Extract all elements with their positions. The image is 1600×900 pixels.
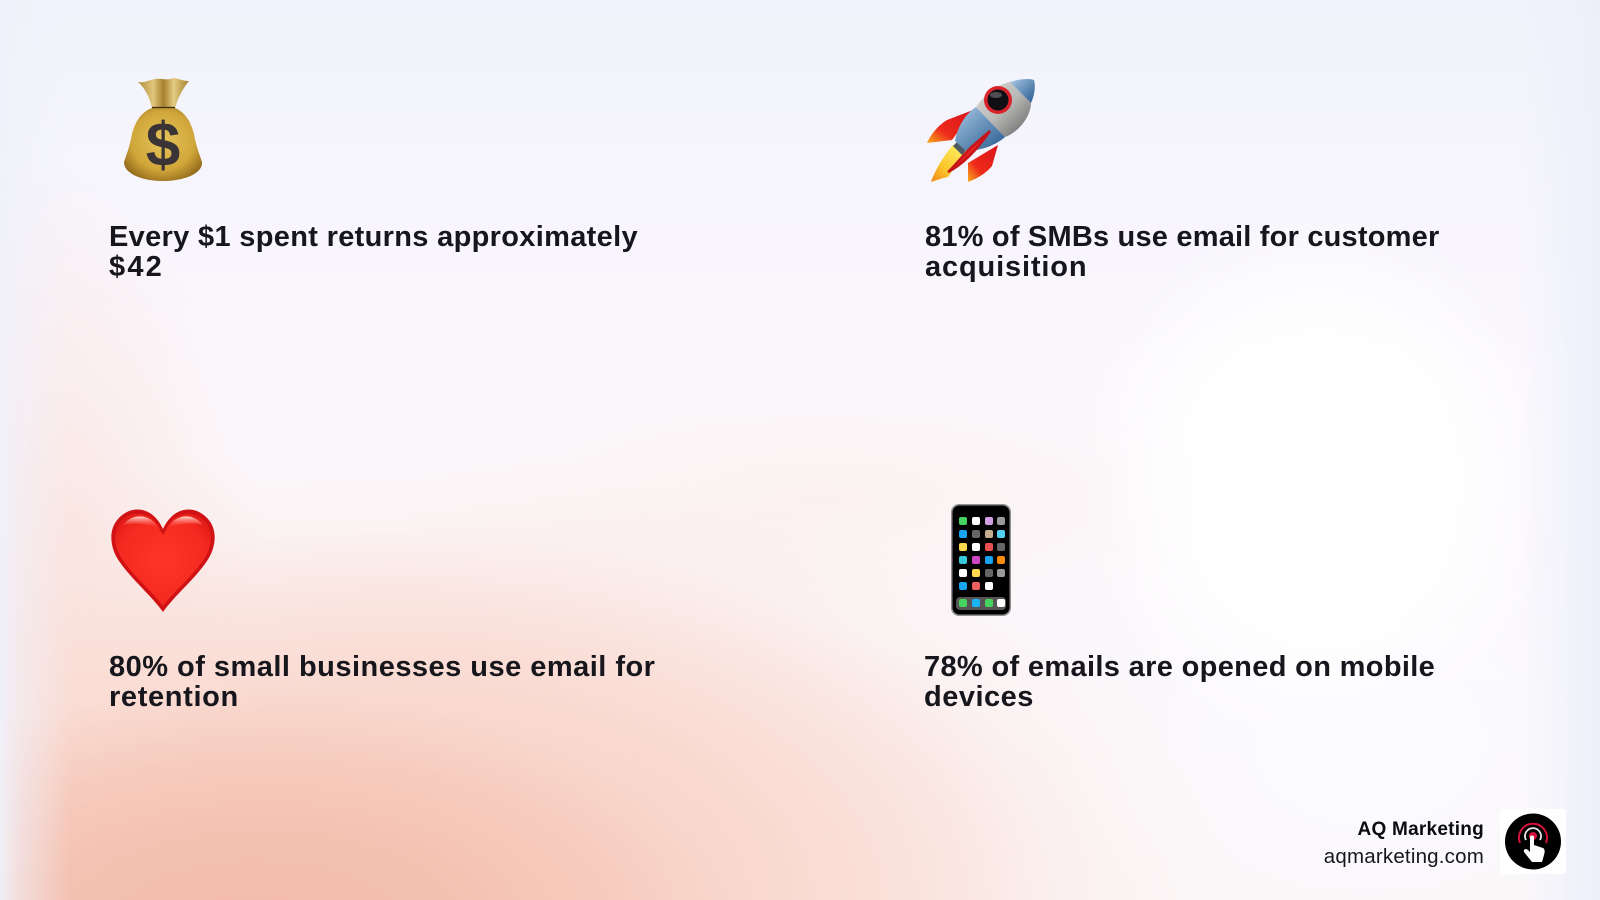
stat text: retention [109,651,655,713]
stat text: SMB acquisition [925,221,1439,283]
stat text: SMB acquisition: 81% of SMBs use email for customer [925,221,1439,253]
stat text: mobile opens [924,651,1435,713]
stat text: retention: retention [109,681,239,713]
stat text: $1 returns $42 [109,221,638,283]
brand url: aqmarketing.com [1324,845,1484,868]
stat text: $1 returns $42: Every $1 spent returns approximately [109,221,638,253]
icon: red heart [111,510,215,612]
icon: money bag [124,78,202,181]
panel: mobile opens [924,504,1435,713]
stat text: retention: 80% of small businesses use email for [109,651,655,683]
brand name: AQ Marketing [1357,819,1484,840]
icon: rocket [927,79,1035,182]
icon: smartphone [951,504,1011,616]
stat text: mobile opens: devices [924,681,1034,713]
stat text: SMB acquisition: acquisition [925,251,1087,283]
logo: pointing hand with signal rings [1505,809,1566,874]
panel: customer retention [109,510,655,713]
stat text: mobile opens: 78% of emails are opened on mobile [924,651,1435,683]
icon: money bag: $ [146,111,180,180]
brand block [1324,809,1566,874]
panel: return on email spend [109,78,638,283]
stat text: $1 returns $42: $42 [109,251,164,283]
panel: customer acquisition [925,79,1439,283]
